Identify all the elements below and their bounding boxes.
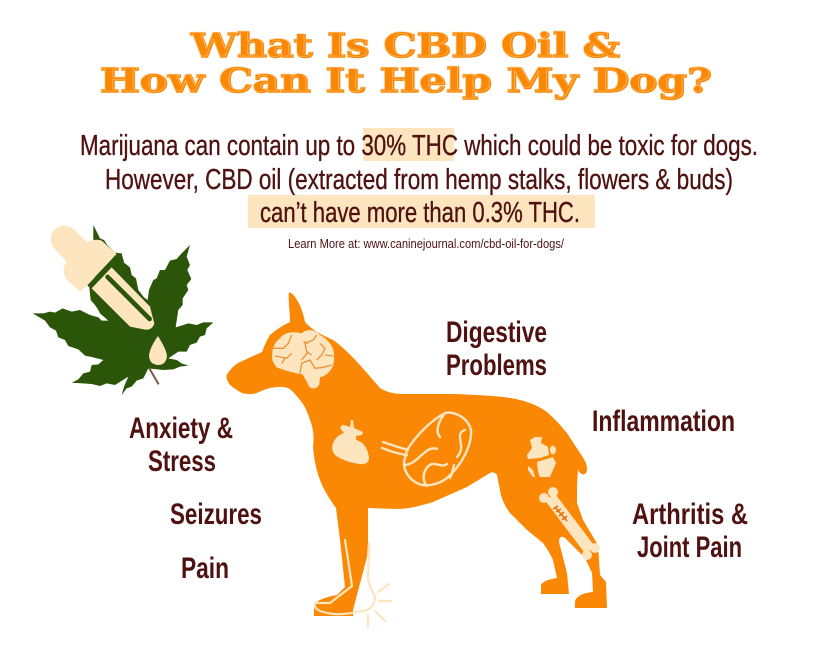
icon: fractured bone: [539, 487, 600, 560]
title: [99, 25, 712, 100]
label: arthritis and joint pain: Joint Pain: [637, 531, 742, 564]
title: What Is CBD Oil &: [189, 25, 619, 64]
label: pain: Pain: [181, 552, 229, 585]
learn more link: Learn More at: www.caninejournal.com/cbd-oil-for-dogs/: [288, 236, 564, 251]
icon: cannabis leaf with dropper: [33, 225, 213, 395]
title: How Can It Help My Dog?: [100, 61, 712, 100]
title: How Can It Help My Dog?: [99, 60, 711, 99]
label: anxiety and stress: Anxiety &: [129, 412, 233, 445]
label: digestive problems: Problems: [446, 349, 547, 382]
label: anxiety and stress: [129, 412, 233, 478]
intro text: [80, 130, 758, 229]
dropper bulb: [51, 225, 117, 292]
stem: [148, 367, 159, 384]
highlight: 30% THC: [363, 128, 454, 161]
dropper slit: [108, 277, 150, 319]
intro text: can’t have more than 0.3% THC.: [260, 197, 580, 229]
highlight: 0.3% THC line: [248, 195, 595, 228]
label: arthritis and joint pain: [632, 498, 748, 564]
icon: sore paw outline: [315, 540, 391, 627]
oil drop: [149, 336, 167, 365]
title: What Is CBD Oil &: [190, 26, 620, 65]
dog silhouette: [226, 292, 607, 616]
leaf: [33, 225, 213, 395]
label: arthritis and joint pain: Arthritis &: [632, 498, 748, 531]
label: digestive problems: Digestive: [446, 316, 547, 349]
icon: brain: [272, 330, 334, 388]
icon: knee joint: [527, 437, 556, 477]
dropper glass: [92, 267, 154, 330]
icon: heart: [332, 420, 369, 464]
label: seizures: Seizures: [170, 498, 262, 531]
dropper collar: [87, 254, 124, 292]
icon: stomach: [382, 413, 471, 486]
label: anxiety and stress: Stress: [148, 445, 216, 478]
label: inflammation: Inflammation: [592, 405, 735, 438]
label: digestive problems: [446, 316, 547, 382]
